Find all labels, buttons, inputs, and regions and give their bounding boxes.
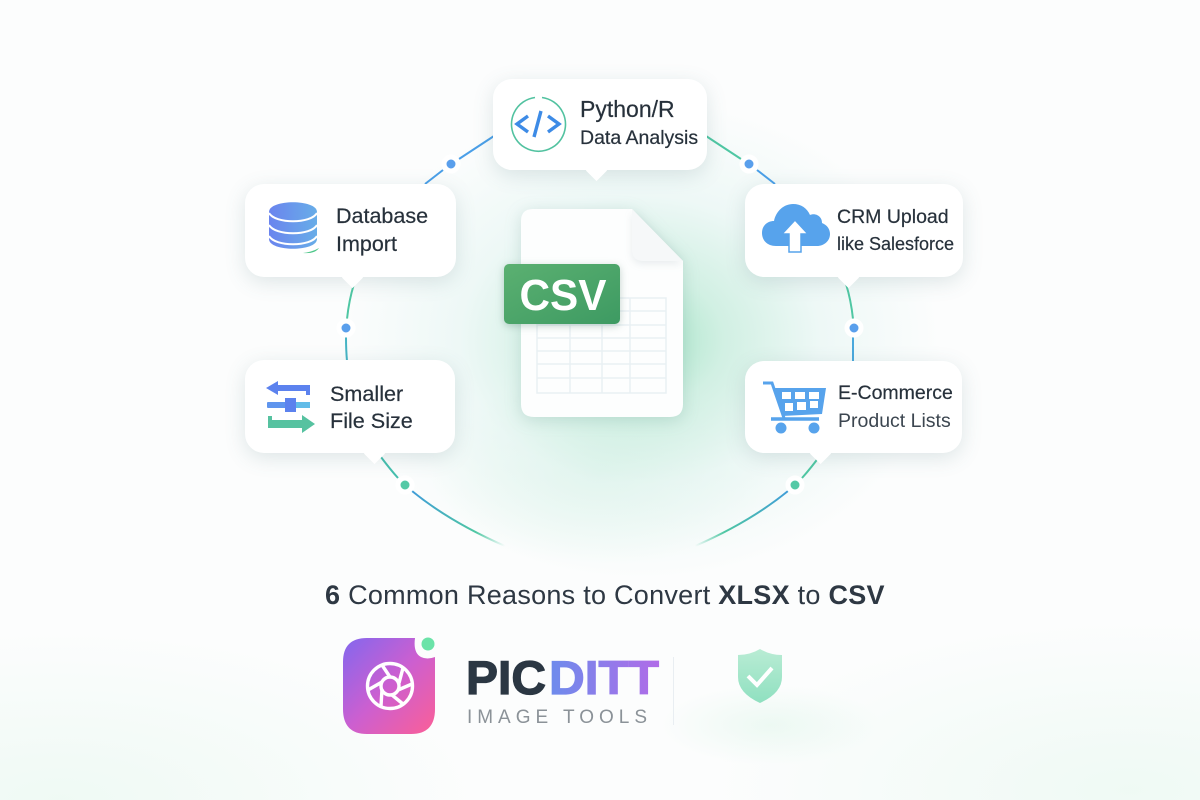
logo wordmark (466, 651, 660, 728)
text: Smaller: Smaller (330, 381, 403, 406)
notification dot (422, 638, 434, 650)
text: Database: Database (336, 204, 428, 228)
card: CRM Upload (745, 184, 963, 277)
page fold (632, 209, 683, 261)
text: CRM Upload: CRM Upload (837, 206, 949, 228)
icon: shopping cart (763, 382, 826, 434)
table grid (537, 298, 666, 393)
icon: shield (738, 649, 782, 703)
text: File Size: File Size (330, 408, 413, 433)
title: 6 Common Reasons to Convert XLSX to CSV (325, 580, 885, 610)
icon: database (269, 202, 319, 254)
text: like Salesforce: like Salesforce (837, 234, 954, 254)
card: Smaller File Size (245, 360, 455, 453)
text: Python/R: Python/R (580, 96, 675, 122)
divider (673, 657, 674, 725)
icon: cloud upload (762, 204, 830, 253)
icon: transfer arrows (266, 381, 315, 433)
logo wordmark: IMAGE TOOLS (467, 707, 652, 728)
text: Import: Import (336, 232, 397, 256)
logo wordmark: DITT (549, 651, 659, 704)
card pointer (342, 267, 363, 288)
logo wordmark: PIC (466, 651, 546, 704)
icon: code (510, 96, 566, 152)
card pointer (364, 443, 385, 464)
shutter mark (368, 664, 412, 708)
text: E-Commerce: E-Commerce (838, 382, 953, 404)
card pointer (838, 267, 859, 288)
text: Product Lists: Product Lists (838, 410, 951, 432)
logo: app icon (343, 638, 435, 734)
card: E-Commerce (745, 361, 962, 453)
document sheet (521, 209, 683, 417)
CSV badge: CSV (520, 271, 607, 320)
card pointer (586, 160, 607, 181)
CSV document (500, 206, 688, 426)
card: Python/R (493, 79, 707, 170)
card pointer (810, 443, 831, 464)
card: Database Import (245, 184, 456, 277)
CSV badge (504, 264, 620, 324)
text: Data Analysis: Data Analysis (580, 127, 698, 149)
